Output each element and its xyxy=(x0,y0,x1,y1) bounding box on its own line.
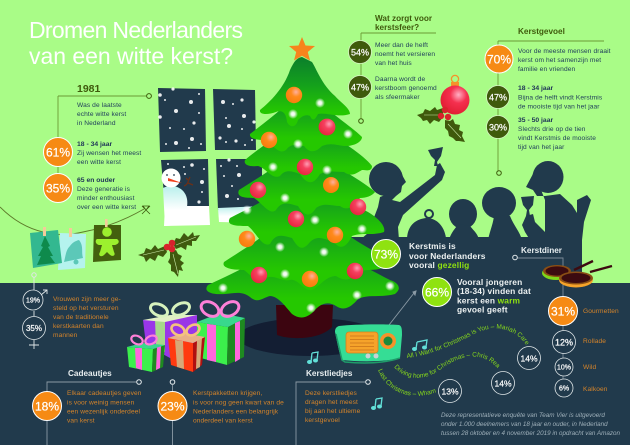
block: kerstsfeer: Meer dan de helft xyxy=(375,42,428,49)
block: kerstgevoel: Slechts drie op de tien xyxy=(518,126,586,133)
block: kerstsfeer: kerstboom genoemd xyxy=(375,85,437,92)
block: kerstliedjes: Kerstliedjes xyxy=(306,369,353,378)
block: kerstsfeer: noemt het versieren xyxy=(375,51,435,58)
block: cadeautjes xyxy=(32,369,284,445)
block: 1981: Zij wensen het meest xyxy=(77,150,141,157)
baubles xyxy=(239,87,366,287)
block: kerstgevoel: 18 - 34 jaar xyxy=(518,85,553,92)
block: kerstgevoel: 35 - 50 jaar xyxy=(518,117,553,124)
block: 1981: 1981 xyxy=(77,83,101,95)
dish xyxy=(407,218,446,238)
47 percent: 47% xyxy=(351,82,369,92)
31 percent: 31% xyxy=(551,304,575,318)
block: kerstsfeer: kerstsfeer? xyxy=(375,23,419,32)
block: kerstsfeer: als sfeermaker xyxy=(375,94,420,101)
bottom layer xyxy=(206,222,399,317)
block: 1981 xyxy=(44,83,151,211)
block: kerstgevoel: Kerstgevoel xyxy=(518,27,565,36)
gifts xyxy=(127,299,245,372)
dark floor panel xyxy=(0,237,630,445)
block: kerstgevoel: familie en vrienden xyxy=(518,66,575,73)
block: warm: kerst een warm xyxy=(457,296,520,306)
19 percent: 19% xyxy=(26,298,40,304)
block: 1981: minder enthousiast xyxy=(77,195,135,202)
12 percent xyxy=(552,330,576,354)
title: van een witte kerst? xyxy=(29,43,233,69)
35 percent: 35% xyxy=(26,324,42,333)
70 percent: 70% xyxy=(487,52,511,66)
61 percent: 61% xyxy=(46,146,70,160)
songs on curved lines xyxy=(378,324,541,403)
18 percent: 18% xyxy=(35,400,59,414)
block: 1981: 18 - 34 jaar xyxy=(77,141,112,148)
block: cadeautjes: een wezenlijk onderdeel xyxy=(67,408,140,416)
14 percent: 14% xyxy=(520,354,538,364)
songs on curved lines: All I Want for Christmas is You – Mariah Carey xyxy=(406,324,528,358)
gender block: steld op het versturen xyxy=(53,305,119,312)
tree xyxy=(206,37,399,338)
block: gezellig xyxy=(372,240,486,270)
block: kerstsfeer: Daarna wordt de xyxy=(375,76,425,83)
top layer xyxy=(260,57,350,126)
block: kerstsfeer: Wat zorgt voor xyxy=(375,14,433,23)
30 percent xyxy=(486,116,510,138)
child xyxy=(449,199,477,229)
woman xyxy=(369,162,403,196)
radio xyxy=(335,291,416,363)
gender block: kerstkaarten dan xyxy=(53,323,104,330)
tree shadow xyxy=(238,318,382,356)
lights xyxy=(218,98,395,313)
block: cadeautjes: van kerst xyxy=(67,418,95,424)
14 percent: 14% xyxy=(494,378,512,388)
10 percent xyxy=(555,358,573,376)
block: kerstdiner: Kalkoen xyxy=(583,386,608,393)
bauble and holly right xyxy=(417,75,470,142)
block: kerstgevoel: kerst om het samenzijn met xyxy=(518,57,601,64)
13 percent: 13% xyxy=(441,386,459,396)
18 percent xyxy=(32,392,62,420)
block: cadeautjes: is voor nog geen kwart van de xyxy=(193,400,284,406)
14 percent xyxy=(518,346,540,370)
block: warm: (18-34) vinden dat xyxy=(457,286,531,296)
card: gingerbread xyxy=(93,219,121,262)
6 percent xyxy=(555,379,573,397)
gender block xyxy=(22,273,121,349)
35 percent: 35% xyxy=(46,182,70,196)
songs on curved lines: Driving home for Christmas – Chris Rea xyxy=(394,352,500,378)
layer 4 xyxy=(238,140,375,215)
block: 1981: over een witte kerst xyxy=(77,204,136,211)
70 percent xyxy=(485,45,513,73)
12 percent: 12% xyxy=(555,338,573,348)
snowman xyxy=(162,168,193,226)
block: 1981: Was de laatste xyxy=(77,102,122,109)
block: kerstgevoel: Voor de meeste mensen draait xyxy=(518,48,611,55)
block: warm: Vooral jongeren xyxy=(457,277,522,287)
block: kerstdiner: Gourmetten xyxy=(583,308,619,315)
footnote: Deze representatieve enquête van Team Vier is uitgevoerd xyxy=(441,412,605,419)
block: kerstliedjes: dragen het meest xyxy=(305,399,358,406)
red gift xyxy=(168,322,205,372)
small green gift xyxy=(127,334,165,372)
block: cadeautjes: Kerstpakketten krijgen, xyxy=(193,390,262,397)
footnote xyxy=(441,412,620,437)
footnote: onder 1.000 deelnemers van 18 jaar en ouder, in Nederland xyxy=(441,421,608,428)
23 percent: 23% xyxy=(160,400,185,414)
block: warm xyxy=(422,277,531,314)
block: 1981: 65 en ouder xyxy=(77,177,116,184)
block: kerstgevoel xyxy=(485,27,611,175)
block: warm: gevoel geeft xyxy=(457,304,508,314)
23 percent xyxy=(158,392,187,420)
block: cadeautjes: Elkaar cadeautjes geven xyxy=(67,390,142,397)
block: cadeautjes: onderdeel van kerst xyxy=(193,418,253,424)
block: gezellig: voor Nederlanders xyxy=(409,251,486,261)
layer 2 xyxy=(250,85,362,151)
gender block: van de traditionele xyxy=(53,314,109,321)
block: kerstgevoel: vindt Kerstmis de mooiste xyxy=(518,135,596,142)
block: cadeautjes: Cadeautjes xyxy=(68,369,112,378)
pink gift xyxy=(197,299,245,365)
block: kerstsfeer xyxy=(348,14,437,123)
47 percent xyxy=(486,86,510,108)
icon: music notes xyxy=(308,340,427,410)
block: cadeautjes: is voor weinig mensen xyxy=(67,400,135,406)
layer 5 xyxy=(229,170,384,248)
6 percent: 6% xyxy=(559,386,569,392)
block: kerstdiner: Wild xyxy=(583,364,596,371)
block: gezellig: Kerstmis is xyxy=(409,241,456,251)
pans xyxy=(542,261,612,288)
holly left xyxy=(138,232,200,277)
gender block: Vrouwen zijn meer ge- xyxy=(53,296,121,303)
block: kerstdiner xyxy=(513,246,619,397)
block: 1981: in Nederland xyxy=(77,120,116,127)
block: kerstliedjes: kerstgevoel xyxy=(305,417,340,424)
layer 6 xyxy=(224,195,386,290)
garland with cards xyxy=(0,206,150,270)
54 percent: 54% xyxy=(351,48,369,58)
bow xyxy=(142,206,150,214)
14 percent xyxy=(492,372,514,394)
girl xyxy=(482,187,516,219)
block: kerstdiner: Rollade xyxy=(583,338,606,345)
block: 1981: echte witte kerst xyxy=(77,111,126,118)
title xyxy=(29,17,243,69)
10 percent: 10% xyxy=(557,364,571,372)
card: tree xyxy=(30,227,62,268)
block: kerstgevoel: Bijna de helft vindt Kerstmis xyxy=(518,94,603,102)
block: kerstliedjes: Deze kerstliedjes xyxy=(305,390,358,397)
block: kerstgevoel: de mooiste tijd van het jaar xyxy=(518,104,600,110)
block: 1981: Deze generatie is xyxy=(77,186,131,193)
card: bell xyxy=(58,228,86,270)
gender block: mannen xyxy=(53,332,78,339)
block: kerstdiner: Kerstdiner xyxy=(521,246,563,255)
block: kerstliedjes: bij aan het ultieme xyxy=(305,408,361,415)
star xyxy=(289,37,315,60)
block: kerstgevoel: tijd van het jaar xyxy=(518,144,565,151)
man xyxy=(532,161,564,193)
windows with snow xyxy=(158,87,262,226)
31 percent xyxy=(548,296,578,326)
block: cadeautjes: Nederlanders een belangrijk xyxy=(193,408,279,416)
block: kerstliedjes xyxy=(296,369,370,445)
73 percent: 73% xyxy=(374,248,398,262)
30 percent: 30% xyxy=(489,122,507,132)
songs on curved lines: Last Christmas – Wham! xyxy=(378,368,436,396)
trunk xyxy=(276,305,333,338)
layer 3 xyxy=(245,112,372,182)
block: 1981: een witte kerst xyxy=(77,159,121,166)
block: gezellig: vooral gezellig xyxy=(409,260,469,270)
footnote: tussen 28 oktober en 4 november 2019 in opdracht van Amazon xyxy=(441,430,620,437)
title: Dromen Nederlanders xyxy=(29,17,243,43)
13 percent xyxy=(438,380,462,402)
family silhouette xyxy=(360,147,591,240)
purple gift xyxy=(143,300,197,358)
66 percent: 66% xyxy=(425,286,449,300)
block: kerstsfeer: van het huis xyxy=(375,60,412,67)
47 percent: 47% xyxy=(489,92,507,102)
